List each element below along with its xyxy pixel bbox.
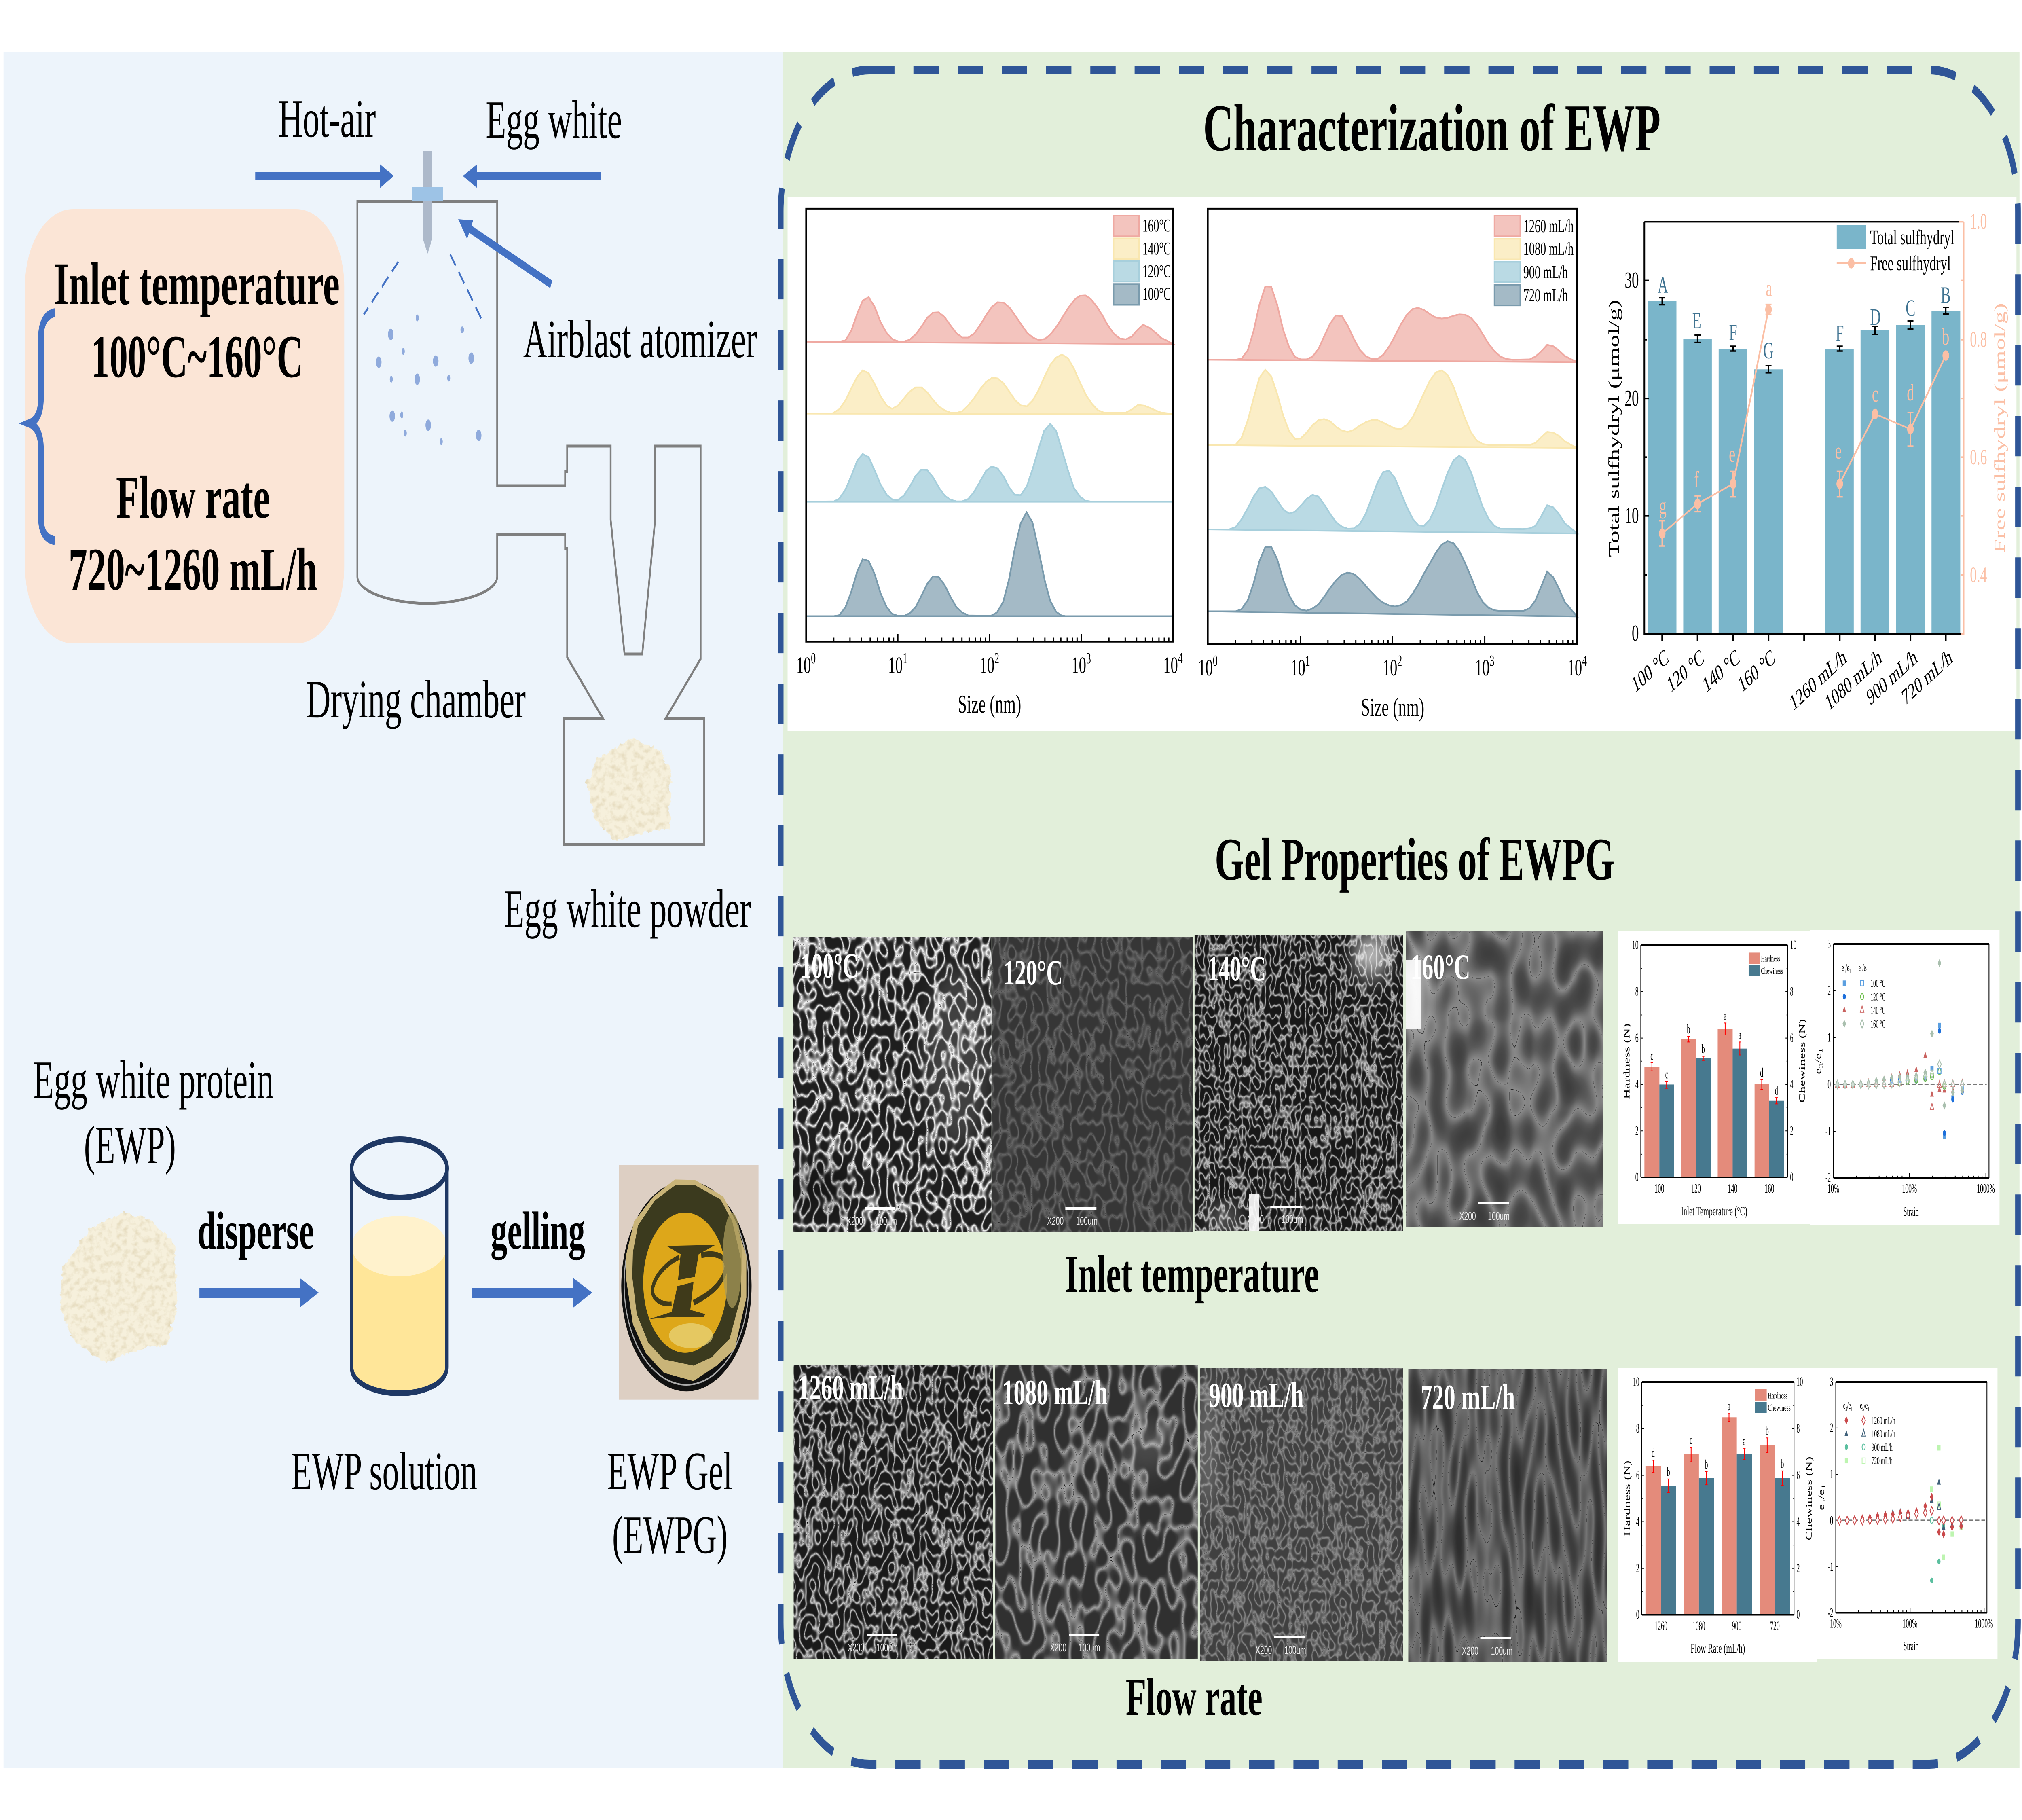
scatter labels: 1 xyxy=(1866,968,1868,975)
axis tick labels: 10 xyxy=(1383,655,1397,681)
SEM image: 900 mL/h: X200 xyxy=(1255,1644,1272,1656)
axis tick labels: 1 xyxy=(903,650,907,667)
axis title: Size (nm) xyxy=(958,689,1021,718)
legend labels: 140°C xyxy=(1142,238,1171,258)
legend labels: 1080 mL/h xyxy=(1523,239,1574,259)
size distribution curves xyxy=(1208,209,1577,644)
scatter labels: 3 xyxy=(1845,1405,1847,1413)
bar chart labels: 720 xyxy=(1770,1619,1780,1633)
free sulfhydryl significance letters: d xyxy=(1907,380,1914,406)
free sulfhydryl significance letters: e xyxy=(1835,438,1842,464)
bar chart labels: Inlet Temperature (°C) xyxy=(1681,1204,1747,1218)
SEM image: 720 mL/h: 100um xyxy=(1491,1644,1512,1657)
hardness axis title: Hardness (N) xyxy=(1622,1460,1632,1536)
text: egg white: Egg white xyxy=(486,90,622,150)
legend labels: 1260 mL/h xyxy=(1523,217,1574,237)
scatter axis title: 1 xyxy=(1820,1484,1827,1489)
bar chart labels: 4 xyxy=(1636,1515,1639,1529)
chart background xyxy=(1810,930,1999,1225)
text: EWPG: (EWPG) xyxy=(612,1505,728,1565)
axis tick labels: 2 xyxy=(1397,652,1402,669)
total sulfhydryl significance letters: G xyxy=(1763,338,1774,364)
left tick labels: 30 xyxy=(1625,268,1639,293)
dashed rounded frame xyxy=(781,70,2018,1764)
scatter labels: 0 xyxy=(1827,1078,1831,1092)
axis tick labels: 0 xyxy=(811,650,816,667)
bar chart labels xyxy=(1632,938,1796,1218)
x tick labels: 100 °C xyxy=(1629,644,1671,698)
left tick labels: 0 xyxy=(1632,621,1639,646)
text: hot-air: Hot-air xyxy=(278,89,376,149)
legend labels: 120°C xyxy=(1142,261,1171,281)
bar chart labels: 4 xyxy=(1790,1078,1794,1092)
scatter axis title: e xyxy=(1814,1068,1823,1074)
scatter labels: 0 xyxy=(1830,1514,1833,1528)
axis tick labels: 10 xyxy=(1291,655,1305,681)
SEM image: 1080 mL/h: X200 xyxy=(1050,1641,1066,1654)
bar chart labels: 8 xyxy=(1797,1422,1800,1436)
chart: harmonic ratio by inlet temperature xyxy=(1810,930,1999,1225)
chart: particle size by inlet temperature xyxy=(796,209,1183,718)
scatter labels xyxy=(1825,938,1995,1219)
chart background xyxy=(1618,931,1810,1224)
bar chart labels: 8 xyxy=(1635,985,1639,999)
legend labels: Free sulfhydryl xyxy=(1870,252,1951,275)
SEM image: 160°C: X200 xyxy=(1459,1210,1476,1222)
free sulfhydryl significance letters: e xyxy=(1729,442,1735,467)
text: inlet temperature: Inlet temperature xyxy=(54,251,340,318)
right axis title: Free sulfhydryl (μmol/g) xyxy=(1991,303,2008,553)
scatter labels: -1 xyxy=(1828,1560,1833,1574)
SEM image: 120°C: 100um xyxy=(1076,1215,1098,1227)
bar chart labels: a xyxy=(1739,1029,1741,1042)
panel: characterization background xyxy=(783,52,2020,1768)
chart: particle size by flow rate xyxy=(1198,209,1587,722)
legend labels xyxy=(1142,215,1171,304)
icon: nozzle xyxy=(412,151,443,254)
scatter axis title: n xyxy=(1820,1499,1827,1504)
total sulfhydryl significance letters: B xyxy=(1941,283,1950,308)
bar chart labels: 10 xyxy=(1797,1375,1803,1389)
hardness axis title: Hardness (N) xyxy=(1622,1023,1631,1099)
scatter labels: 1 xyxy=(1830,1467,1833,1481)
axis tick labels: 10 xyxy=(796,653,811,678)
axis tick labels: 2 xyxy=(994,650,999,667)
SEM image: 1080 mL/h: 100um xyxy=(1079,1641,1100,1654)
scatter labels: e xyxy=(1843,1400,1845,1411)
SEM image: 1080 mL/h: 1080 mL/h xyxy=(1002,1373,1108,1412)
x tick labels: 140 °C xyxy=(1700,644,1742,698)
SEM image: 120°C: 120°C xyxy=(1003,953,1062,992)
SEM image: 120°C xyxy=(992,937,1193,1232)
chart background xyxy=(1817,1368,1997,1659)
free sulfhydryl significance letters: f xyxy=(1694,467,1699,493)
axis tick labels: 10 xyxy=(1475,655,1489,681)
bar chart labels: a xyxy=(1728,1399,1730,1414)
scatter labels: 100 °C xyxy=(1870,977,1886,989)
legend labels xyxy=(1523,217,1574,306)
SEM image: 140°C xyxy=(1195,935,1403,1231)
SEM image: 160°C: 100um xyxy=(1488,1210,1510,1222)
scatter labels: 10% xyxy=(1830,1617,1842,1631)
bar chart labels: 2 xyxy=(1636,1562,1639,1576)
spray droplets xyxy=(376,315,482,445)
scatter labels: 100% xyxy=(1903,1617,1917,1631)
bar chart labels: 0 xyxy=(1797,1608,1800,1622)
scatter labels: -1 xyxy=(1825,1124,1831,1139)
scatter labels: /e xyxy=(1862,962,1866,973)
left axis title: Total sulfhydryl (μmol/g) xyxy=(1605,300,1622,557)
scatter axis title: e xyxy=(1817,1504,1826,1510)
scatter labels: /e xyxy=(1864,1400,1868,1411)
legend labels: 100°C xyxy=(1142,284,1171,304)
white chart band xyxy=(788,197,2016,731)
axes and points xyxy=(1836,1382,1987,1613)
photo: EWP gel xyxy=(619,1165,759,1400)
bar chart labels: 6 xyxy=(1636,1469,1639,1482)
free sulfhydryl significance letters: b xyxy=(1942,324,1949,350)
SEM image: 1260 mL/h xyxy=(793,1365,993,1659)
axis tick labels: 3 xyxy=(1086,650,1091,667)
scatter labels: e xyxy=(1859,962,1861,973)
scatter labels: 2 xyxy=(1827,984,1831,998)
total sulfhydryl significance letters xyxy=(1658,273,1950,364)
size distribution curves xyxy=(806,209,1173,642)
bar chart labels: Chewiness xyxy=(1768,1403,1791,1413)
SEM image: 120°C: X200 xyxy=(1047,1215,1064,1227)
bar chart labels: 0 xyxy=(1635,1170,1639,1184)
bar chart labels: 140 xyxy=(1728,1182,1737,1196)
scatter labels: e xyxy=(1860,1400,1862,1411)
SEM image: 720 mL/h xyxy=(1408,1369,1607,1662)
x tick labels xyxy=(1629,644,1955,716)
caption: flow rate: Flow rate xyxy=(1126,1667,1263,1727)
x tick labels: 160 °C xyxy=(1735,644,1778,698)
bar chart labels: 10 xyxy=(1632,938,1639,952)
text: gelling: gelling xyxy=(491,1201,585,1260)
right tick labels: 0.6 xyxy=(1970,445,1987,469)
axis tick labels: 10 xyxy=(980,653,994,678)
axis tick labels: 0 xyxy=(1213,652,1218,669)
scatter labels: 160 °C xyxy=(1870,1018,1886,1030)
SEM image: 900 mL/h xyxy=(1197,1368,1403,1661)
SEM image: 1080 mL/h xyxy=(995,1365,1198,1659)
bar chart labels: 8 xyxy=(1790,985,1793,999)
chart: hardness and chewiness by inlet temperature xyxy=(1618,931,1810,1224)
bar chart labels: 2 xyxy=(1635,1124,1639,1138)
bar chart labels: 160 xyxy=(1765,1182,1774,1196)
axis tick labels: 10 xyxy=(888,653,903,678)
text: flow rate: Flow rate xyxy=(116,464,270,531)
bar chart labels: 4 xyxy=(1635,1078,1639,1092)
SEM image: 160°C xyxy=(1406,931,1603,1227)
chewiness axis title: Chewiness (N) xyxy=(1797,1019,1807,1103)
scatter axis title: /e xyxy=(1817,1489,1826,1499)
bar chart labels: 10 xyxy=(1790,938,1796,952)
spray cone dashes xyxy=(364,254,482,320)
caption: inlet temperature: Inlet temperature xyxy=(1065,1244,1319,1304)
right tick labels: 1.0 xyxy=(1970,209,1987,233)
scatter labels: 3 xyxy=(1844,968,1846,975)
scatter labels: 1260 mL/h xyxy=(1872,1414,1895,1426)
bar chart labels: 900 xyxy=(1732,1619,1741,1633)
left tick labels: 10 xyxy=(1625,503,1639,528)
SEM image: 1260 mL/h: 100um xyxy=(876,1641,898,1654)
icon: powder in collector xyxy=(587,737,671,842)
right tick labels xyxy=(1970,209,1987,587)
SEM image: 160°C: 160°C xyxy=(1411,947,1470,986)
bar chart labels: b xyxy=(1702,1042,1705,1056)
left tick labels: 20 xyxy=(1625,386,1639,411)
scatter labels: 720 mL/h xyxy=(1872,1455,1893,1467)
bar chart labels: 6 xyxy=(1790,1031,1793,1045)
SEM image: 100°C: X200 xyxy=(846,1215,863,1227)
SEM image: 900 mL/h: 100um xyxy=(1284,1644,1306,1656)
scatter labels: -2 xyxy=(1828,1606,1833,1620)
SEM image: 720 mL/h: X200 xyxy=(1462,1644,1478,1657)
scatter labels: 1 xyxy=(1849,968,1851,975)
total sulfhydryl significance letters: D xyxy=(1870,305,1881,330)
x tick labels: 900 mL/h xyxy=(1864,644,1920,710)
text: drying chamber: Drying chamber xyxy=(307,669,526,730)
bar chart labels: b xyxy=(1687,1022,1690,1036)
right tick labels: 0.8 xyxy=(1970,327,1987,351)
panel: drying conditions xyxy=(25,209,344,643)
bar chart labels: c xyxy=(1665,1068,1668,1081)
bar chart labels: d xyxy=(1775,1084,1778,1098)
axis tick labels: 3 xyxy=(1489,652,1494,669)
scatter labels xyxy=(1828,1375,1993,1653)
arrow: egg white xyxy=(463,164,601,188)
bar chart labels: b xyxy=(1781,1457,1784,1471)
arrow: airblast atomizer xyxy=(458,219,551,284)
text: flow rate range: 720~1260 mL/h xyxy=(68,536,317,603)
legend labels: 900 mL/h xyxy=(1523,263,1568,283)
scatter labels: Strain xyxy=(1904,1205,1919,1219)
bar chart labels: a xyxy=(1724,1009,1726,1023)
axis tick labels: 10 xyxy=(1072,653,1086,678)
scatter labels: 1080 mL/h xyxy=(1872,1427,1895,1440)
heading: gel properties: Gel Properties of EWPG xyxy=(1215,826,1615,893)
SEM image: 140°C: 140°C xyxy=(1208,949,1266,988)
scatter labels: 120 °C xyxy=(1870,990,1886,1003)
bar chart labels: b xyxy=(1667,1465,1670,1479)
bar chart labels: a xyxy=(1743,1435,1746,1448)
scatter labels: -2 xyxy=(1825,1171,1831,1185)
SEM image: 1260 mL/h: X200 xyxy=(848,1641,864,1654)
scatter labels: 100% xyxy=(1902,1182,1917,1196)
text: EWP gel: EWP Gel xyxy=(607,1441,732,1501)
bar chart labels: 8 xyxy=(1636,1422,1639,1436)
SEM image: 140°C: X200 xyxy=(1247,1213,1264,1225)
scatter labels: 1 xyxy=(1851,1405,1853,1413)
bar chart labels: d xyxy=(1652,1446,1655,1460)
total sulfhydryl significance letters: A xyxy=(1658,273,1668,298)
x tick labels: 1080 mL/h xyxy=(1822,644,1885,716)
SEM image: 100°C xyxy=(790,937,992,1232)
SEM image: 1260 mL/h: 1260 mL/h xyxy=(798,1368,903,1407)
bar chart labels: 0 xyxy=(1790,1170,1793,1184)
x tick labels: 120 °C xyxy=(1665,644,1707,698)
bar chart labels: 1080 xyxy=(1692,1619,1705,1633)
bar chart labels: 6 xyxy=(1797,1469,1800,1482)
scatter labels: 1 xyxy=(1868,1405,1869,1413)
chart background xyxy=(1618,1368,1817,1662)
icon: egg white protein powder xyxy=(60,1212,177,1363)
scatter axis title: 1 xyxy=(1817,1048,1824,1053)
scatter labels: e xyxy=(1842,962,1844,973)
SEM image: 720 mL/h: 720 mL/h xyxy=(1421,1378,1515,1417)
scatter labels: Strain xyxy=(1904,1639,1919,1653)
drying chamber and cyclone outline xyxy=(357,201,704,844)
bar chart labels: Chewiness xyxy=(1761,966,1783,976)
legend labels: Total sulfhydryl xyxy=(1870,226,1954,249)
axes and points xyxy=(1834,944,1989,1178)
icon: beaker of EWP solution xyxy=(351,1139,447,1393)
bar chart labels: 6 xyxy=(1635,1031,1639,1045)
scatter labels: 3 xyxy=(1830,1375,1833,1389)
axis tick labels: 4 xyxy=(1178,650,1183,667)
right tick labels: 0.4 xyxy=(1970,563,1987,587)
scatter labels: /e xyxy=(1846,962,1849,973)
scatter labels: 140 °C xyxy=(1870,1004,1886,1016)
bar chart labels: 1260 xyxy=(1654,1619,1667,1633)
axis tick labels: 10 xyxy=(1198,655,1213,681)
conditions box xyxy=(25,209,344,643)
text: EWP solution: EWP solution xyxy=(292,1441,477,1501)
scatter axis title: /e xyxy=(1814,1053,1823,1063)
chart: harmonic ratio by flow rate xyxy=(1817,1368,1997,1659)
scatter labels: 10% xyxy=(1827,1182,1839,1196)
bar chart labels: 2 xyxy=(1790,1124,1793,1138)
total sulfhydryl significance letters: F xyxy=(1836,321,1844,346)
axis tick labels: 10 xyxy=(1163,653,1178,678)
scatter labels: 2 xyxy=(1830,1421,1833,1435)
bar chart labels: Flow Rate (mL/h) xyxy=(1690,1642,1745,1656)
x tick labels: 1260 mL/h xyxy=(1787,644,1849,716)
total sulfhydryl significance letters: C xyxy=(1906,296,1915,321)
bar chart labels xyxy=(1633,1375,1803,1656)
bars, axes and error bars xyxy=(1641,945,1787,1177)
panel: spray drying and gel preparation background xyxy=(4,52,783,1768)
total sulfhydryl significance letters: F xyxy=(1729,320,1737,345)
arrow: gelling xyxy=(472,1278,592,1308)
SEM image: 100°C: 100um xyxy=(875,1215,897,1227)
scatter labels: 5 xyxy=(1861,968,1862,975)
free sulfhydryl significance letters xyxy=(1659,276,1949,519)
text: egg white powder: Egg white powder xyxy=(504,879,751,939)
chart: hardness and chewiness by flow rate xyxy=(1618,1368,1817,1662)
bar chart labels: 4 xyxy=(1797,1515,1800,1529)
scatter labels: 3 xyxy=(1827,938,1831,951)
SEM image: 100°C: 100°C xyxy=(800,946,859,985)
axis tick labels xyxy=(1198,652,1587,681)
bar chart labels: 100 xyxy=(1655,1182,1664,1196)
legend labels xyxy=(1870,226,1954,275)
bar chart labels: b xyxy=(1766,1424,1769,1438)
bar chart labels: c xyxy=(1690,1433,1692,1447)
total sulfhydryl significance letters: E xyxy=(1692,308,1701,334)
scatter labels: 1000% xyxy=(1975,1617,1993,1631)
x tick labels: 720 mL/h xyxy=(1899,644,1955,710)
text: airblast atomizer: Airblast atomizer xyxy=(523,309,757,369)
scatter axis title: n xyxy=(1817,1063,1824,1068)
bar chart labels: 120 xyxy=(1691,1182,1701,1196)
brace xyxy=(30,313,55,541)
bar chart labels: Hardness xyxy=(1761,954,1780,963)
bar chart labels: 2 xyxy=(1797,1562,1800,1576)
bar chart labels: 0 xyxy=(1636,1608,1639,1622)
text: EWP: (EWP) xyxy=(84,1115,176,1175)
text: temperature range: 100°C~160°C xyxy=(91,324,303,391)
SEM image: 900 mL/h: 900 mL/h xyxy=(1209,1376,1304,1415)
bars, axes and error bars xyxy=(1642,1382,1794,1615)
free sulfhydryl significance letters: a xyxy=(1766,276,1772,301)
scatter labels: /e xyxy=(1847,1400,1851,1411)
chewiness axis title: Chewiness (N) xyxy=(1804,1456,1813,1541)
free sulfhydryl significance letters: c xyxy=(1872,381,1878,407)
text: disperse: disperse xyxy=(197,1201,314,1260)
legend labels: 720 mL/h xyxy=(1523,286,1568,306)
bar chart labels: 10 xyxy=(1633,1375,1639,1389)
text: egg white protein: Egg white protein xyxy=(33,1050,274,1110)
axis tick labels: 10 xyxy=(1567,655,1582,681)
axis tick labels: 4 xyxy=(1582,652,1587,669)
bar chart labels: c xyxy=(1650,1049,1653,1063)
title: characterization: Characterization of EWP xyxy=(1203,91,1660,165)
bar chart labels: d xyxy=(1760,1066,1764,1080)
scatter labels: 1 xyxy=(1827,1031,1831,1045)
scatter labels: 5 xyxy=(1862,1405,1864,1413)
scatter labels: 900 mL/h xyxy=(1872,1441,1893,1453)
arrow: disperse xyxy=(199,1278,319,1308)
SEM image: 140°C: 100um xyxy=(1282,1213,1303,1225)
bar chart labels: Hardness xyxy=(1768,1390,1787,1400)
arrow: hot-air xyxy=(255,164,394,188)
bar chart labels: b xyxy=(1705,1458,1708,1471)
free sulfhydryl significance letters: g xyxy=(1659,493,1667,519)
axis title: Size (nm) xyxy=(1361,692,1424,722)
chart: total and free sulfhydryl xyxy=(1605,209,2008,716)
legend labels: 160°C xyxy=(1142,215,1171,235)
bars, axes, error bars and line xyxy=(1644,222,1964,641)
axis tick labels: 1 xyxy=(1305,652,1310,669)
axis tick labels xyxy=(796,650,1183,678)
left tick labels xyxy=(1625,268,1639,646)
scatter labels: 1000% xyxy=(1977,1182,1995,1196)
